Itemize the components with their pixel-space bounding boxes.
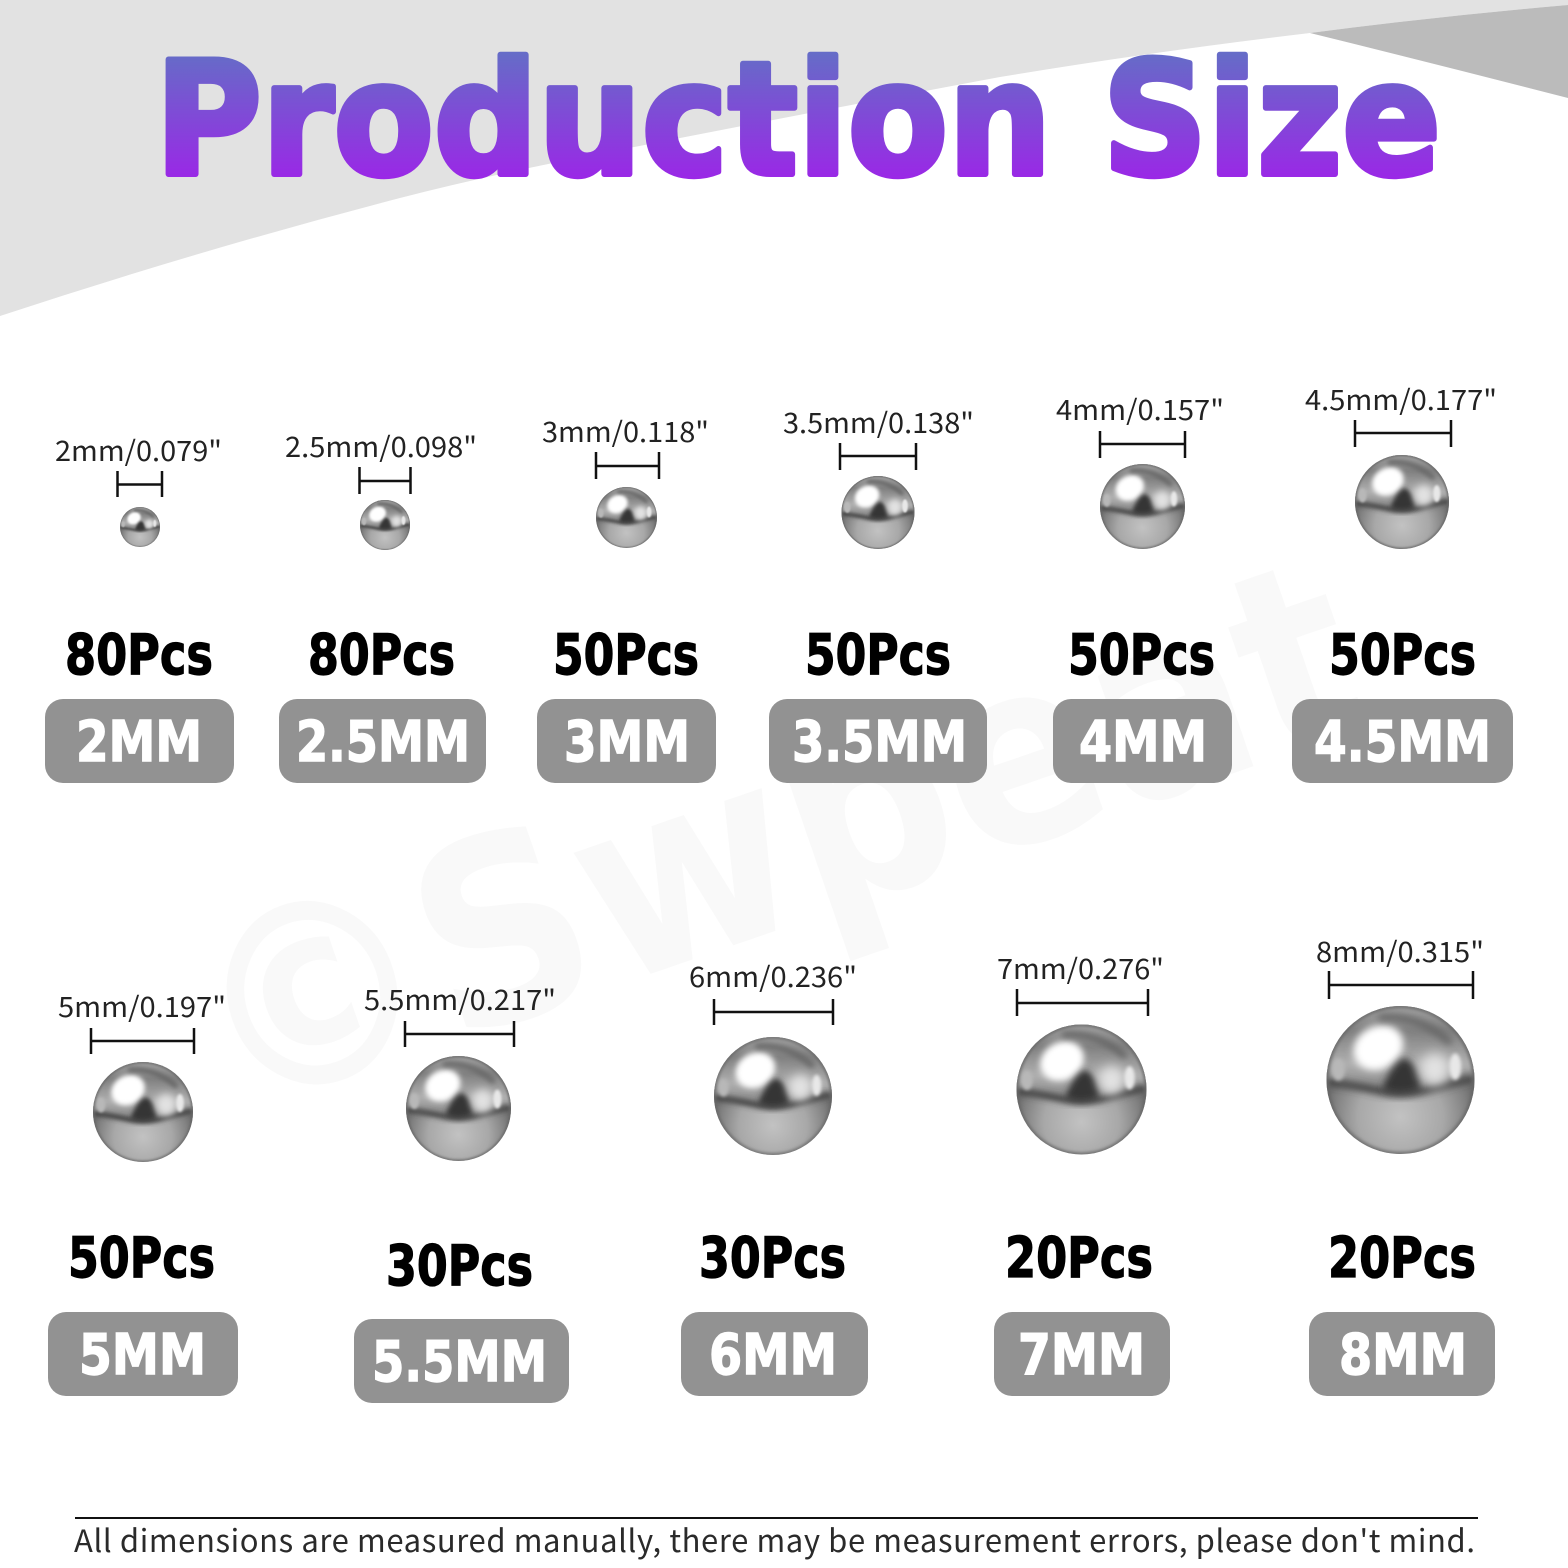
badge 6mm bbox=[681, 1312, 868, 1396]
badge 2.5mm: 2.5MM bbox=[296, 710, 470, 775]
count 6mm: 30Pcs bbox=[699, 1226, 846, 1291]
count 5mm: 50Pcs bbox=[68, 1226, 215, 1291]
item: 4mm bbox=[1053, 389, 1232, 783]
item: 3.5mm bbox=[769, 402, 987, 783]
bracket 4.5mm bbox=[1355, 420, 1451, 447]
bracket 2.5mm bbox=[360, 467, 410, 494]
bracket 6mm bbox=[714, 999, 833, 1025]
badge 2mm bbox=[45, 699, 234, 783]
count 5.5mm: 30Pcs bbox=[386, 1234, 533, 1299]
size label 3.5mm: 3.5mm/0.138" bbox=[783, 402, 974, 442]
badge 4.5mm bbox=[1292, 699, 1513, 783]
item: 5.5mm bbox=[354, 979, 569, 1403]
bracket 2mm bbox=[118, 471, 162, 497]
watermark: ©Swpeat bbox=[155, 501, 1396, 1176]
ball 5mm bbox=[92, 1059, 194, 1162]
badge 4mm bbox=[1053, 699, 1232, 783]
size label 7mm: 7mm/0.276" bbox=[997, 948, 1164, 988]
count 8mm: 20Pcs bbox=[1328, 1226, 1476, 1291]
size label 4mm: 4mm/0.157" bbox=[1056, 389, 1224, 429]
item: 8mm bbox=[1309, 931, 1495, 1396]
badge 5mm bbox=[48, 1312, 238, 1396]
count 3mm: 50Pcs bbox=[553, 623, 699, 688]
badge 7mm bbox=[994, 1312, 1170, 1396]
bracket 3mm bbox=[596, 452, 659, 479]
count 2.5mm: 80Pcs bbox=[308, 623, 455, 688]
ball 8mm bbox=[1325, 1002, 1476, 1154]
ball 2.5mm bbox=[359, 498, 410, 550]
ball 4.5mm bbox=[1354, 452, 1450, 549]
bracket 5.5mm bbox=[405, 1021, 514, 1047]
bracket 7mm bbox=[1017, 989, 1148, 1016]
badge 3.5mm bbox=[769, 699, 987, 783]
badge 3mm bbox=[537, 699, 716, 783]
darker grey corner shape bbox=[1310, 5, 1568, 98]
count 3.5mm: 50Pcs bbox=[805, 623, 951, 688]
count 2mm: 80Pcs bbox=[65, 623, 213, 688]
size label 2mm: 2mm/0.079" bbox=[55, 430, 222, 470]
badge 4.5mm: 4.5MM bbox=[1314, 710, 1491, 775]
badge 4mm: 4MM bbox=[1079, 710, 1207, 775]
badge 5.5mm: 5.5MM bbox=[372, 1330, 547, 1395]
size label 5mm: 5mm/0.197" bbox=[58, 986, 226, 1026]
size label 3mm: 3mm/0.118" bbox=[542, 411, 709, 451]
count 4mm: 50Pcs bbox=[1068, 623, 1215, 688]
ball 4mm bbox=[1099, 461, 1186, 549]
badge 5mm: 5MM bbox=[79, 1323, 206, 1388]
badge 2.5mm bbox=[279, 699, 486, 783]
size label 8mm: 8mm/0.315" bbox=[1316, 931, 1484, 971]
badge 3mm: 3MM bbox=[564, 710, 690, 775]
badge 2mm: 2MM bbox=[76, 710, 202, 775]
item: 6mm bbox=[681, 956, 868, 1396]
badge 7mm: 7MM bbox=[1018, 1323, 1145, 1388]
ball 3mm bbox=[595, 485, 658, 548]
bracket 4mm bbox=[1100, 431, 1185, 458]
item: 5mm bbox=[48, 986, 238, 1396]
size label 2.5mm: 2.5mm/0.098" bbox=[285, 426, 477, 466]
item: 4.5mm bbox=[1292, 379, 1513, 783]
count 4.5mm: 50Pcs bbox=[1329, 623, 1476, 688]
item: 2mm bbox=[45, 430, 234, 783]
badge 5.5mm bbox=[354, 1319, 569, 1403]
ball 6mm bbox=[713, 1033, 833, 1155]
item: 2.5mm bbox=[279, 426, 486, 783]
footer note: All dimensions are measured manually, there may be measurement errors, please don't mind. bbox=[74, 1516, 1475, 1561]
bracket 3.5mm bbox=[840, 443, 916, 470]
badge 8mm bbox=[1309, 1312, 1495, 1396]
ball 2mm bbox=[120, 506, 160, 547]
badge 6mm: 6MM bbox=[709, 1323, 837, 1388]
ball 5.5mm bbox=[405, 1053, 512, 1161]
light grey header shape bbox=[0, 0, 1568, 316]
ball 3.5mm bbox=[841, 474, 915, 549]
bracket 8mm bbox=[1329, 971, 1473, 999]
item: 3mm bbox=[537, 411, 716, 783]
title: Production Size bbox=[155, 29, 1441, 212]
size label 5.5mm: 5.5mm/0.217" bbox=[364, 979, 556, 1019]
size label 6mm: 6mm/0.236" bbox=[689, 956, 857, 996]
badge 8mm: 8MM bbox=[1339, 1323, 1467, 1388]
item: 7mm bbox=[994, 948, 1170, 1396]
bracket 5mm bbox=[91, 1028, 194, 1054]
size label 4.5mm: 4.5mm/0.177" bbox=[1305, 379, 1497, 419]
count 7mm: 20Pcs bbox=[1005, 1226, 1153, 1291]
badge 3.5mm: 3.5MM bbox=[792, 710, 967, 775]
ball 7mm bbox=[1015, 1021, 1148, 1154]
